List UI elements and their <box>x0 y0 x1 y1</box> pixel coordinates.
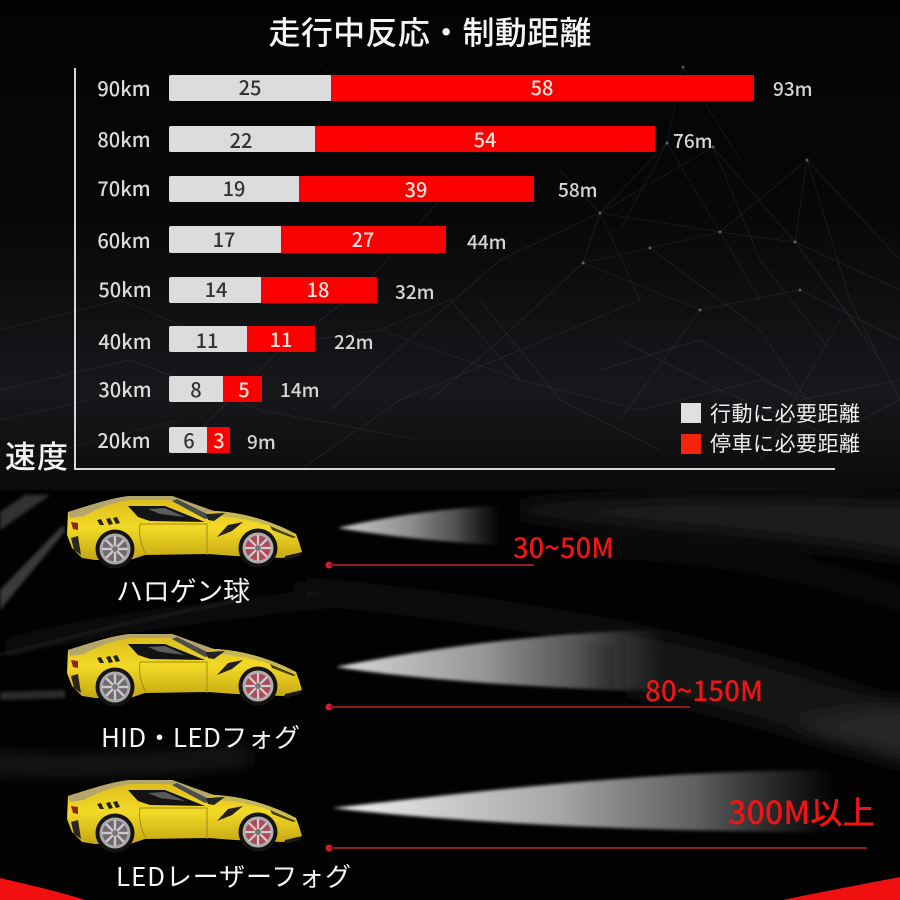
legend: 停車に必要距離 <box>710 428 860 458</box>
row: 30km: 30km <box>98 374 152 403</box>
row: 80km: 80km <box>97 124 151 153</box>
row: 90km: 90km <box>97 73 151 102</box>
range label: 30-50M: 30~50M <box>513 527 614 567</box>
bar chart <box>97 72 813 455</box>
row: 40km: 22m <box>334 328 374 355</box>
row: 50km <box>98 274 435 305</box>
row: 30km: 14m <box>280 376 320 403</box>
red corner bottom left <box>0 878 85 900</box>
row: 80km: 22 <box>230 125 252 154</box>
beam: LED laser <box>333 770 835 832</box>
row: 50km: 18 <box>307 274 329 303</box>
row: 40km: 11 <box>196 325 218 354</box>
row: 30km: 8 <box>190 374 202 403</box>
red corner bottom right <box>783 877 900 900</box>
row: 90km: 58 <box>531 72 553 101</box>
row: 20km <box>97 425 276 455</box>
row: 80km <box>97 124 713 154</box>
row: 60km <box>97 224 507 255</box>
beam: HID LED <box>336 630 665 692</box>
legend <box>681 398 860 458</box>
car: HID LED <box>67 634 302 706</box>
legend: 行動に必要距離 <box>710 398 860 428</box>
row: 30km <box>98 374 320 403</box>
row: 60km: 17 <box>213 224 235 253</box>
car label: HID LED: HID・LEDフォグ <box>101 718 300 755</box>
chart axes <box>75 68 835 469</box>
row: 80km: 54 <box>474 124 496 153</box>
range line: 300M <box>326 844 867 852</box>
y axis title: 速度 <box>5 432 68 477</box>
range line: 80-150M <box>326 704 690 710</box>
row: 60km: 44m <box>467 228 507 255</box>
row: 70km: 58m <box>558 176 598 203</box>
car: LED laser <box>67 780 302 852</box>
row: 40km: 40km <box>98 326 152 355</box>
car: halogen <box>67 496 302 568</box>
row: 70km: 19 <box>223 173 245 202</box>
range label: 300M: 300M以上 <box>728 788 875 834</box>
row: 50km: 50km <box>98 274 152 303</box>
row: 50km: 14 <box>205 274 227 303</box>
row: 20km: 20km <box>97 425 151 454</box>
row: 30km: 5 <box>238 374 250 403</box>
row: 20km: 6 <box>183 425 195 454</box>
car label: halogen: ハロゲン球 <box>116 570 250 609</box>
row: 50km: 32m <box>395 278 435 305</box>
row: 70km: 39 <box>405 174 427 203</box>
row: 60km: 60km <box>97 225 151 254</box>
row: 80km: 76m <box>673 127 713 154</box>
chart background <box>0 0 900 490</box>
beam: halogen <box>338 506 500 545</box>
range line: 30-50M <box>326 562 534 568</box>
row: 20km: 3 <box>213 425 225 454</box>
row: 70km: 70km <box>97 173 151 202</box>
row: 90km: 25 <box>239 72 261 101</box>
car label: LED laser: LEDレーザーフォグ <box>116 857 351 894</box>
range label: 80-150M: 80~150M <box>645 670 763 710</box>
row: 60km: 27 <box>352 224 374 253</box>
row: 40km: 11 <box>270 324 292 353</box>
row: 90km <box>97 72 813 102</box>
row: 70km <box>97 173 598 203</box>
title: 走行中反応・制動距離 <box>268 8 592 54</box>
row: 20km: 9m <box>247 428 276 455</box>
row: 90km: 93m <box>773 75 813 102</box>
row: 40km <box>98 324 374 355</box>
headlight comparison background <box>0 490 900 900</box>
